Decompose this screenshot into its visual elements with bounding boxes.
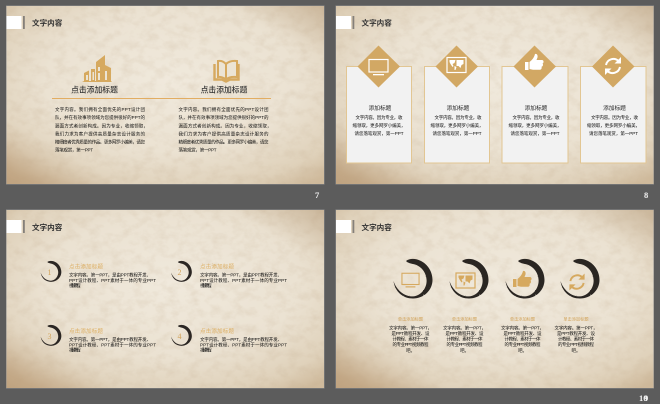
text block left: [55, 106, 148, 154]
feature 4: 吧。: [572, 348, 580, 353]
card 4: 文字内容。因为专业，收: [591, 114, 638, 121]
text block left: 文字内容。我们拥有全面优先的PPT设计团: [55, 106, 146, 113]
page number 10: 10: [639, 393, 648, 403]
item 3: 视频教程。: [69, 347, 83, 354]
item 2: 2: [178, 268, 182, 277]
text block left: 队，并在有效事项领域为您提供很好的PPT的: [55, 114, 146, 121]
feature 1: 单击添加标题: [398, 316, 424, 322]
card 2: 缩领取，更多网罗小编美，: [430, 122, 484, 129]
text block left: 漏面方式者创新构成。因为专业，收缩领取，: [55, 122, 148, 130]
text block right: 精细度者优秀质量的作品。更多网罗小编美，请您: [178, 138, 269, 146]
card 2: 文字内容。因为专业，收: [434, 114, 482, 121]
card 1: 文字内容。因为专业，收: [356, 114, 403, 121]
card 3: 添加标题: [525, 104, 548, 112]
text block right: [178, 106, 272, 154]
item 4: 4: [178, 332, 182, 341]
card 2: [424, 46, 490, 163]
item 3: PPT设计教程、PPT素材于一体的专业PPT: [69, 341, 156, 348]
feature 1: 是PPT教程开发、设: [392, 330, 430, 337]
feature 2: 文字内容。第一PPT，: [443, 324, 486, 332]
feature 1: 吧。: [406, 348, 415, 353]
text block right: 文字内容。我们拥有全面优先的PPT设计团: [178, 106, 269, 113]
feature 3: 单击添加标题: [510, 316, 536, 322]
feature 1: [389, 259, 432, 353]
item 4: 点击添加标题: [200, 327, 234, 335]
item 4: PPT设计教程、PPT素材于一体的专业PPT: [200, 341, 287, 348]
feature 1: 计教程、素材于一体: [392, 336, 429, 342]
card 4: [580, 46, 646, 163]
column headings: 点击添加标题: [201, 84, 248, 94]
feature 2: 计教程、素材于一体: [446, 336, 483, 342]
card 2: 添加标题: [447, 104, 470, 112]
card 4: 请您落笔观赏，第一PPT: [589, 130, 638, 137]
card 4: 添加标题: [603, 104, 626, 112]
feature 4: [554, 259, 600, 353]
item 1: PPT设计教程、PPT素材于一体的专业PPT: [69, 277, 156, 284]
feature 2: 单击添加标题: [452, 316, 478, 322]
text block right: 队，并在有效事项领域为您提供很好的PPT的: [178, 114, 269, 121]
card 3: 缩领取，更多网罗小编美，: [508, 122, 562, 129]
slide 9: [6, 210, 324, 388]
feature 4: 是PPT教程开发、设: [557, 330, 596, 337]
heading: 文字内容: [32, 222, 63, 232]
feature 4: 计教程、素材于一体: [558, 336, 594, 342]
heading: 文字内容: [32, 18, 63, 28]
page number 8: 8: [644, 190, 648, 200]
card 3: 文字内容。因为专业，收: [512, 114, 560, 121]
feature 3: 的专业PPT视频教程: [504, 341, 541, 348]
card 1: 缩领取，更多网罗小编美，: [352, 122, 406, 129]
header tab: [336, 16, 354, 29]
card 2: 请您落笔观赏，第一PPT: [432, 130, 482, 137]
page number 9: 9: [644, 393, 648, 403]
feature 3: 是PPT教程开发、设: [504, 330, 542, 337]
feature 4: 的专业PPT视频教程: [558, 341, 594, 348]
item 2: 视频教程。: [200, 282, 214, 289]
divider: [52, 98, 271, 99]
feature 2: 的专业PPT视频教程: [446, 341, 483, 348]
text block left: 落笔观赏，第一PPT: [55, 146, 93, 154]
card 4: 缩领取，更多网罗小编美，: [587, 122, 640, 129]
card 1: 请您落笔观赏，第一PPT: [354, 130, 404, 137]
item 2: 文字内容。第一PPT，是由PPT教程开发、: [200, 272, 282, 278]
header tab: [6, 16, 25, 29]
feature 4: 文字内容。第一PPT，: [554, 324, 598, 332]
text block right: 我们力求为客户提供高质量杂志设计服务的: [178, 130, 269, 138]
item 3: 3: [48, 332, 52, 341]
icon: buildings: [82, 55, 112, 82]
feature 1: 的专业PPT视频教程: [392, 341, 429, 348]
feature 2: [443, 259, 488, 353]
slide 8: [336, 6, 654, 184]
item 3: 文字内容。第一PPT，是由PPT教程开发、: [69, 336, 151, 343]
item 3: [41, 325, 156, 354]
item 1: [41, 261, 156, 289]
text block left: 精细度者优秀质量的作品。更多网罗小编美，请您: [55, 138, 146, 146]
header tab: [6, 220, 25, 233]
column headings: [71, 84, 248, 94]
feature 3: 计教程、素材于一体: [504, 336, 541, 342]
feature 3: [501, 259, 544, 353]
item 2: [171, 261, 287, 289]
card 3: [502, 46, 568, 163]
slide 7: [6, 6, 324, 184]
item 2: 点击添加标题: [200, 262, 234, 270]
item 4: 视频教程。: [200, 347, 214, 354]
card 1: 添加标题: [369, 104, 392, 112]
feature 1: 文字内容。第一PPT，: [389, 324, 432, 332]
item 1: 视频教程。: [69, 282, 83, 289]
text block left: 我们力求为客户提供高质量杂志设计服务的: [55, 130, 146, 138]
page number 7: 7: [315, 190, 320, 200]
text block right: 落笔观赏，第一PPT: [178, 146, 217, 154]
heading: 文字内容: [362, 222, 392, 232]
heading: 文字内容: [362, 18, 392, 28]
header tab: [336, 220, 354, 233]
text block right: 漏面方式者创新构成。因为专业，收缩领取，: [178, 122, 272, 130]
item 3: 点击添加标题: [69, 327, 103, 335]
feature 2: 吧。: [460, 348, 469, 353]
item 1: 文字内容。第一PPT，是由PPT教程开发、: [69, 272, 151, 278]
column headings: 点击添加标题: [71, 84, 118, 94]
item 1: 点击添加标题: [69, 262, 103, 270]
card 3: 请您落笔观赏，第一PPT: [510, 130, 560, 137]
item 4: 文字内容。第一PPT，是由PPT教程开发、: [200, 336, 282, 343]
item 4: [171, 325, 287, 354]
card 1: [346, 46, 412, 163]
feature 2: 是PPT教程开发、设: [446, 330, 484, 337]
feature 3: 文字内容。第一PPT，: [501, 324, 544, 332]
slide 10: [336, 210, 654, 388]
item 1: 1: [48, 268, 52, 277]
feature 4: 单击添加标题: [563, 316, 589, 322]
icon: book: [214, 61, 238, 82]
feature 3: 吧。: [518, 348, 527, 353]
item 2: PPT设计教程、PPT素材于一体的专业PPT: [200, 277, 287, 284]
